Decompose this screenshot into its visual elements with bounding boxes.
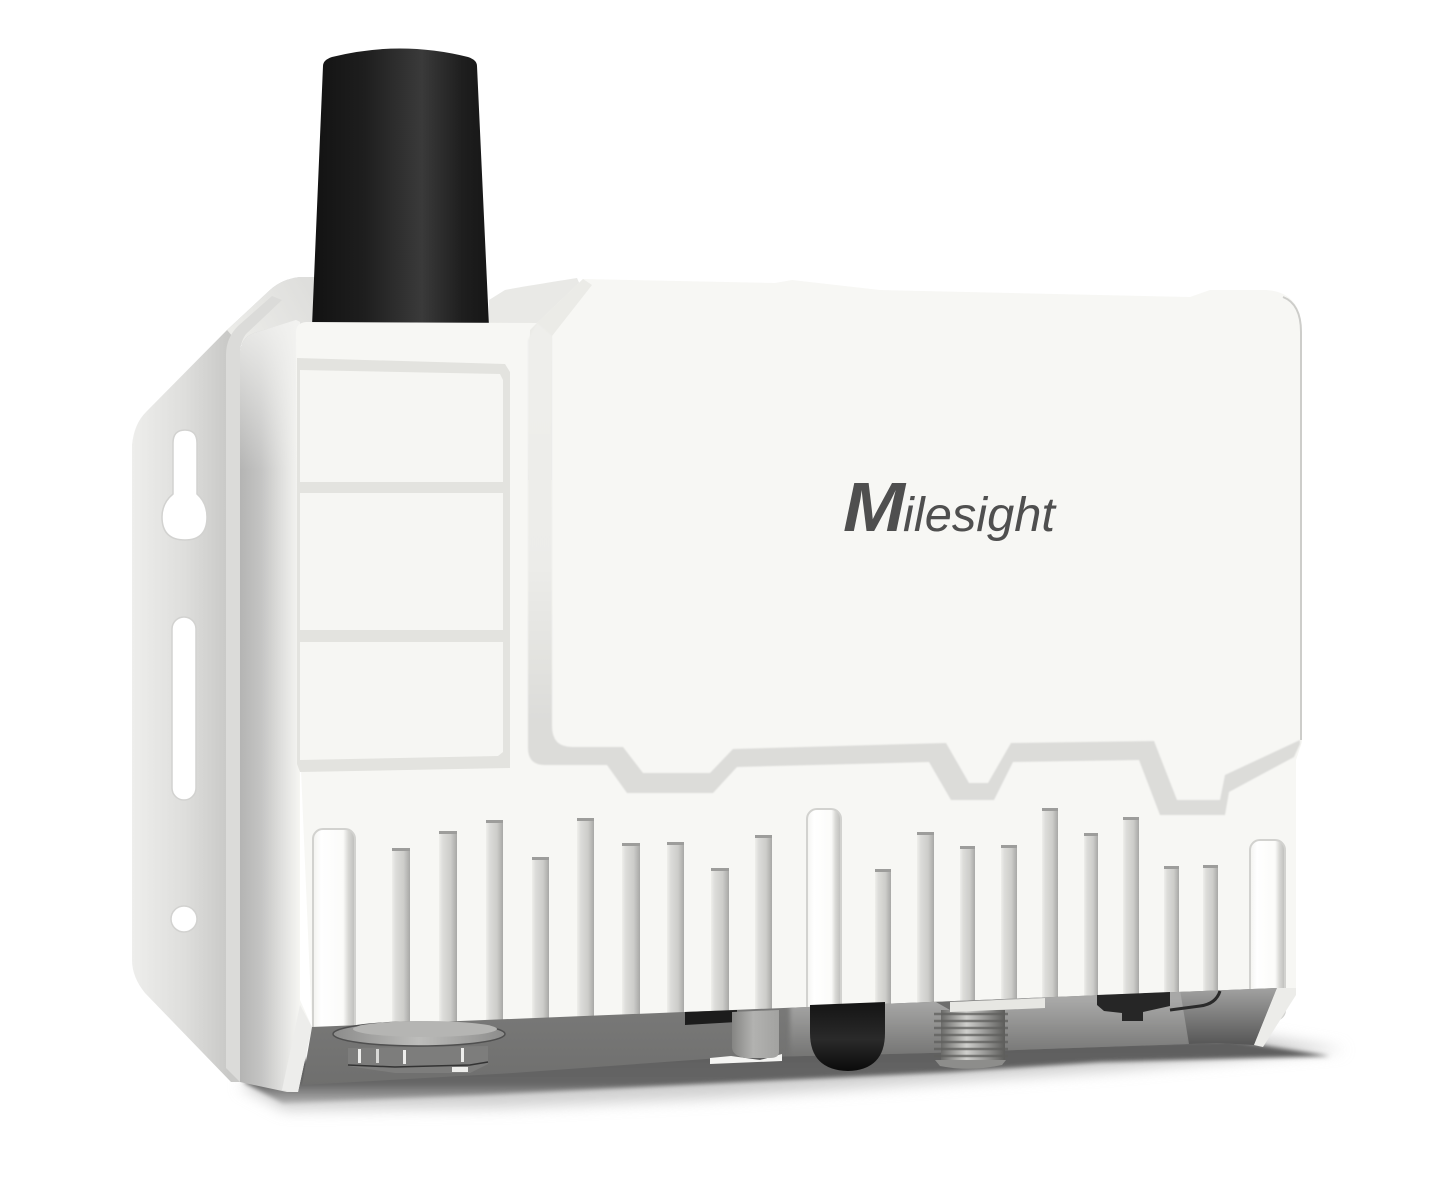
black dome cap xyxy=(810,1002,885,1071)
panel: top button xyxy=(300,370,503,482)
right corner wedge xyxy=(1254,988,1296,1047)
top ledge behind lid xyxy=(489,278,600,330)
antenna xyxy=(312,48,489,326)
lid rim top band xyxy=(528,279,592,480)
lid rim lower band xyxy=(528,323,1300,815)
black socket xyxy=(685,1010,737,1025)
black right connector and cable xyxy=(1097,991,1220,1021)
icon: long mounting slot xyxy=(172,617,196,800)
icon: keyhole slot xyxy=(162,430,207,540)
panel: bottom button xyxy=(300,642,503,760)
bracket top band xyxy=(227,277,320,345)
icon: round mounting hole xyxy=(171,906,197,932)
cable gland xyxy=(333,1021,505,1073)
ground shadow xyxy=(240,1036,1345,1110)
device illustration xyxy=(132,48,1333,1116)
panel: middle button xyxy=(300,493,503,630)
ventilation fins xyxy=(313,808,1285,1044)
side face of enclosure xyxy=(226,296,312,1092)
logo: Milesight: ilesight xyxy=(903,489,1057,542)
front face of enclosure xyxy=(296,279,1302,1027)
lid right edge xyxy=(1283,297,1301,740)
button panels on left column xyxy=(297,358,510,772)
grey plug xyxy=(732,1010,779,1058)
mounting bracket plate xyxy=(132,277,320,1082)
logo: Milesight: M xyxy=(843,468,907,546)
logo: Milesight xyxy=(843,468,1057,546)
white strip xyxy=(710,1054,782,1064)
underside recess xyxy=(302,985,1296,1085)
threaded RF connector xyxy=(934,998,1045,1069)
